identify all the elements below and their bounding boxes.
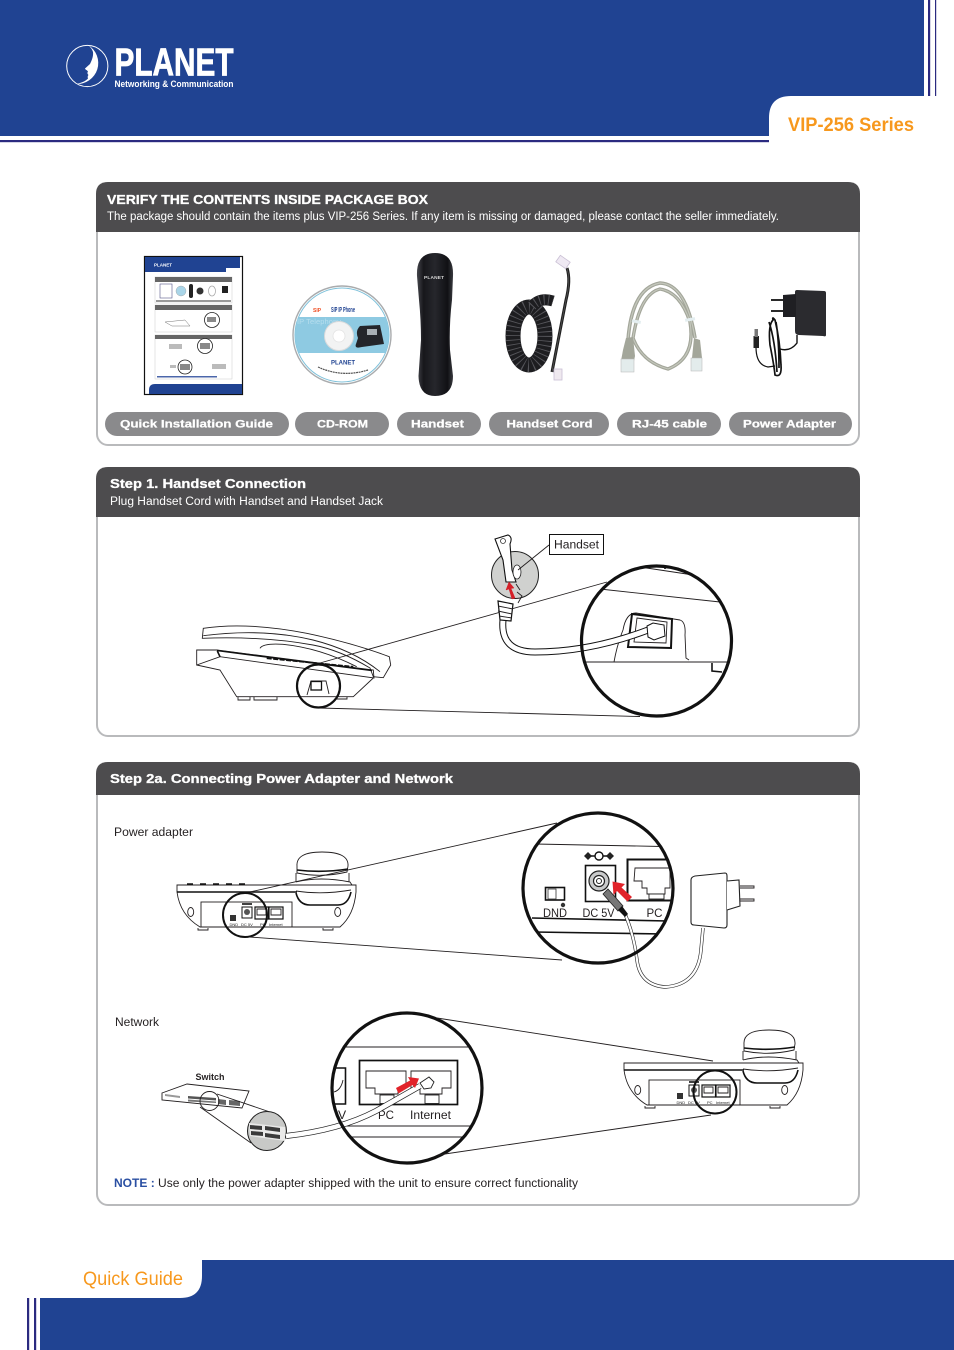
- heading: VERIFY THE CONTENTS INSIDE PACKAGE BOX: [107, 193, 429, 207]
- PC port: [628, 860, 678, 900]
- handset label: Handset: [554, 538, 600, 552]
- footer title: Quick Guide: [83, 1269, 183, 1290]
- phone back view: power: PC: [260, 922, 266, 927]
- small ring: power: [223, 893, 267, 937]
- panel header: [96, 467, 860, 517]
- phone back view: network: [624, 1030, 803, 1108]
- phone back view: power: Internet: [269, 922, 283, 927]
- pill: RJ-45 cable: [617, 412, 721, 436]
- switch device: [162, 1084, 249, 1108]
- pill: quick installation guide: Quick Installation Guide: [120, 418, 273, 430]
- detail circle: network ports: [334, 1046, 470, 1138]
- icon: RJ-45 cable: [621, 283, 702, 372]
- switch label: Switch: [196, 1072, 224, 1082]
- series title: VIP-256 Series: [788, 114, 914, 136]
- small ring: network: [694, 1070, 736, 1114]
- PC label: PC: [646, 906, 663, 920]
- network cable: [286, 1077, 434, 1136]
- handset label: [550, 534, 604, 554]
- phone back view: power: DND: [230, 922, 238, 927]
- DND label: DND: [543, 906, 567, 920]
- phone side view: [197, 626, 391, 700]
- detail circle ring: power: [523, 813, 673, 963]
- panel header: [96, 182, 860, 232]
- small detail circle: [297, 664, 340, 708]
- polarity symbol: [584, 852, 614, 860]
- detail circle ring: network: [332, 1013, 482, 1163]
- panel: step 2a power adapter and network: [96, 762, 860, 1205]
- DC socket: [586, 866, 616, 902]
- pill: handset: Handset: [411, 418, 464, 430]
- icon: handset: [417, 253, 453, 396]
- network label: Network: [115, 1015, 160, 1029]
- icon: CD-ROM disc: SIP IP Phone: [331, 307, 355, 314]
- pill: CD-ROM: CD-ROM: [317, 418, 368, 430]
- power adapter label: Power adapter: [114, 825, 193, 839]
- icon: handset cord: [513, 255, 570, 380]
- panel frame: [97, 763, 859, 1205]
- phone back view: power: [177, 852, 356, 930]
- label pills: [105, 412, 852, 436]
- icon: wall adapter outline: [691, 873, 754, 928]
- pill: quick installation guide: [105, 412, 289, 436]
- handset socket detail circle: [492, 535, 538, 603]
- pill: CD-ROM: [295, 412, 389, 436]
- panel: step 1 handset connection: [96, 467, 860, 736]
- icon: handset: PLANET: [424, 275, 444, 281]
- icon: CD-ROM disc: PLANET: [331, 360, 355, 366]
- DND switch: [546, 888, 564, 900]
- zoom guide lines: power: [250, 823, 562, 960]
- big circle ring: [582, 566, 732, 716]
- pill: power adapter: [729, 412, 852, 436]
- icon: CD-ROM disc: [293, 286, 391, 384]
- detail circle: DC jack: [532, 844, 670, 935]
- phone back view: network: Internet: [716, 1100, 730, 1105]
- icon: power adapter: [754, 290, 826, 376]
- switch detail circle: [248, 1112, 286, 1150]
- phone back view: power: DC 5V: [241, 922, 253, 927]
- Internet label: Internet: [410, 1108, 452, 1122]
- wordmark: PLANET: [114, 42, 234, 84]
- adapter plug and cable: [603, 889, 703, 987]
- phone back view: network: DND: [676, 1100, 685, 1105]
- handset cord with plug: [498, 601, 665, 652]
- footer band: [27, 1260, 954, 1350]
- left port label fragment: V: [338, 1108, 347, 1122]
- logo: PLANET: [67, 42, 234, 89]
- description: Plug Handset Cord with Handset and Handset Jack: [110, 496, 383, 508]
- header band: [0, 0, 936, 142]
- leader line: [518, 545, 549, 570]
- pill: handset cord: Handset Cord: [506, 418, 592, 430]
- tagline: Networking & Communication: [114, 79, 234, 89]
- note: NOTE : Use only the power adapter shipped with the unit to ensure correct functionality: [114, 1176, 579, 1190]
- PC label: PC: [378, 1108, 394, 1122]
- icon: CD-ROM disc: SIP: [313, 308, 322, 314]
- red arrow: power plug: [612, 882, 632, 902]
- big detail circle: [586, 568, 727, 673]
- phone back view: network: PC: [707, 1100, 713, 1105]
- DC 5V label: DC 5V: [582, 906, 615, 920]
- red arrow: [506, 582, 515, 599]
- icon: moon face: [67, 45, 108, 87]
- port frame: [360, 1060, 458, 1104]
- phone back view: network: DC 5V: [688, 1100, 700, 1105]
- pill: handset cord: [489, 412, 609, 436]
- icon: quick installation guide booklet: PLANET: [154, 262, 172, 268]
- pill: handset: [397, 412, 481, 436]
- icon: CD-ROM disc: IP Telephony: [297, 317, 341, 326]
- red arrow: network: [396, 1077, 419, 1094]
- pill: power adapter: Power Adapter: [743, 418, 837, 430]
- heading: Step 2a. Connecting Power Adapter and Network: [110, 772, 454, 786]
- zoom guide lines: [319, 582, 640, 716]
- panel frame: [97, 183, 859, 445]
- switch: [162, 1072, 270, 1143]
- description: The package should contain the items plus VIP-256 Series. If any item is missing or damaged, please contact the seller immediately.: [107, 211, 779, 223]
- pill: RJ-45 cable: RJ-45 cable: [632, 418, 707, 430]
- heading: Step 1. Handset Connection: [110, 477, 306, 491]
- zoom guide lines: network: [437, 1018, 713, 1155]
- panel frame: [97, 468, 859, 736]
- panel: verify package contents: [96, 182, 860, 445]
- panel header: [96, 762, 860, 795]
- icon: quick installation guide booklet: [144, 256, 242, 394]
